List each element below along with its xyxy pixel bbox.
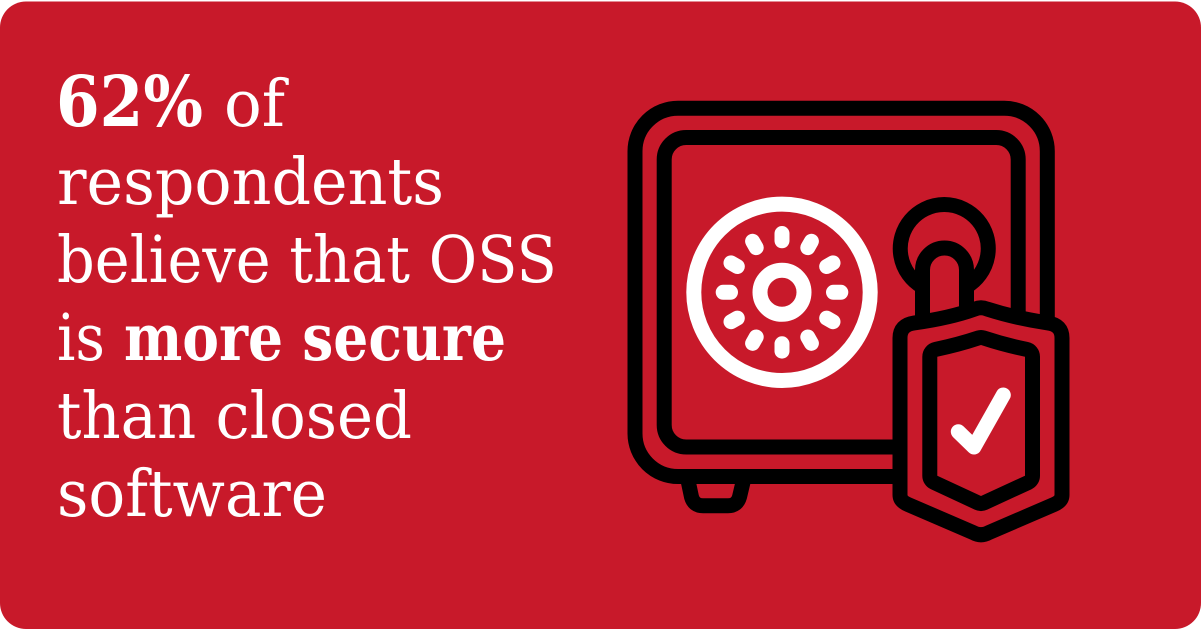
dial ticks <box>723 234 841 351</box>
padlock shackle <box>922 248 966 330</box>
icon: safe with padlock <box>635 108 1062 535</box>
icon: check mark <box>958 395 1003 447</box>
line 4: is more secure: more secure <box>124 300 506 376</box>
line 2: respondents: respondents <box>57 145 444 220</box>
padlock shield body <box>900 308 1062 535</box>
safe outer body <box>635 108 1047 476</box>
dial outer ring <box>694 204 870 380</box>
line 6: software: software <box>57 457 327 532</box>
line 3: believe that OSS: believe that OSS <box>57 223 557 298</box>
combination dial <box>694 204 870 380</box>
dial inner ring <box>760 270 804 314</box>
safe foot <box>688 478 744 506</box>
line 5: than closed: than closed <box>57 379 412 454</box>
inner shield band <box>937 345 1025 496</box>
statistic text block <box>56 60 557 532</box>
line 4: is more secure: is <box>57 301 105 376</box>
padlock shackle ring <box>900 205 988 286</box>
padlock inner shield <box>937 345 1025 496</box>
line 1: 62% of: of <box>224 67 289 142</box>
safe door <box>664 138 1018 447</box>
inner shield face <box>937 345 1025 496</box>
line 1: 62% of: 62% <box>56 60 203 143</box>
